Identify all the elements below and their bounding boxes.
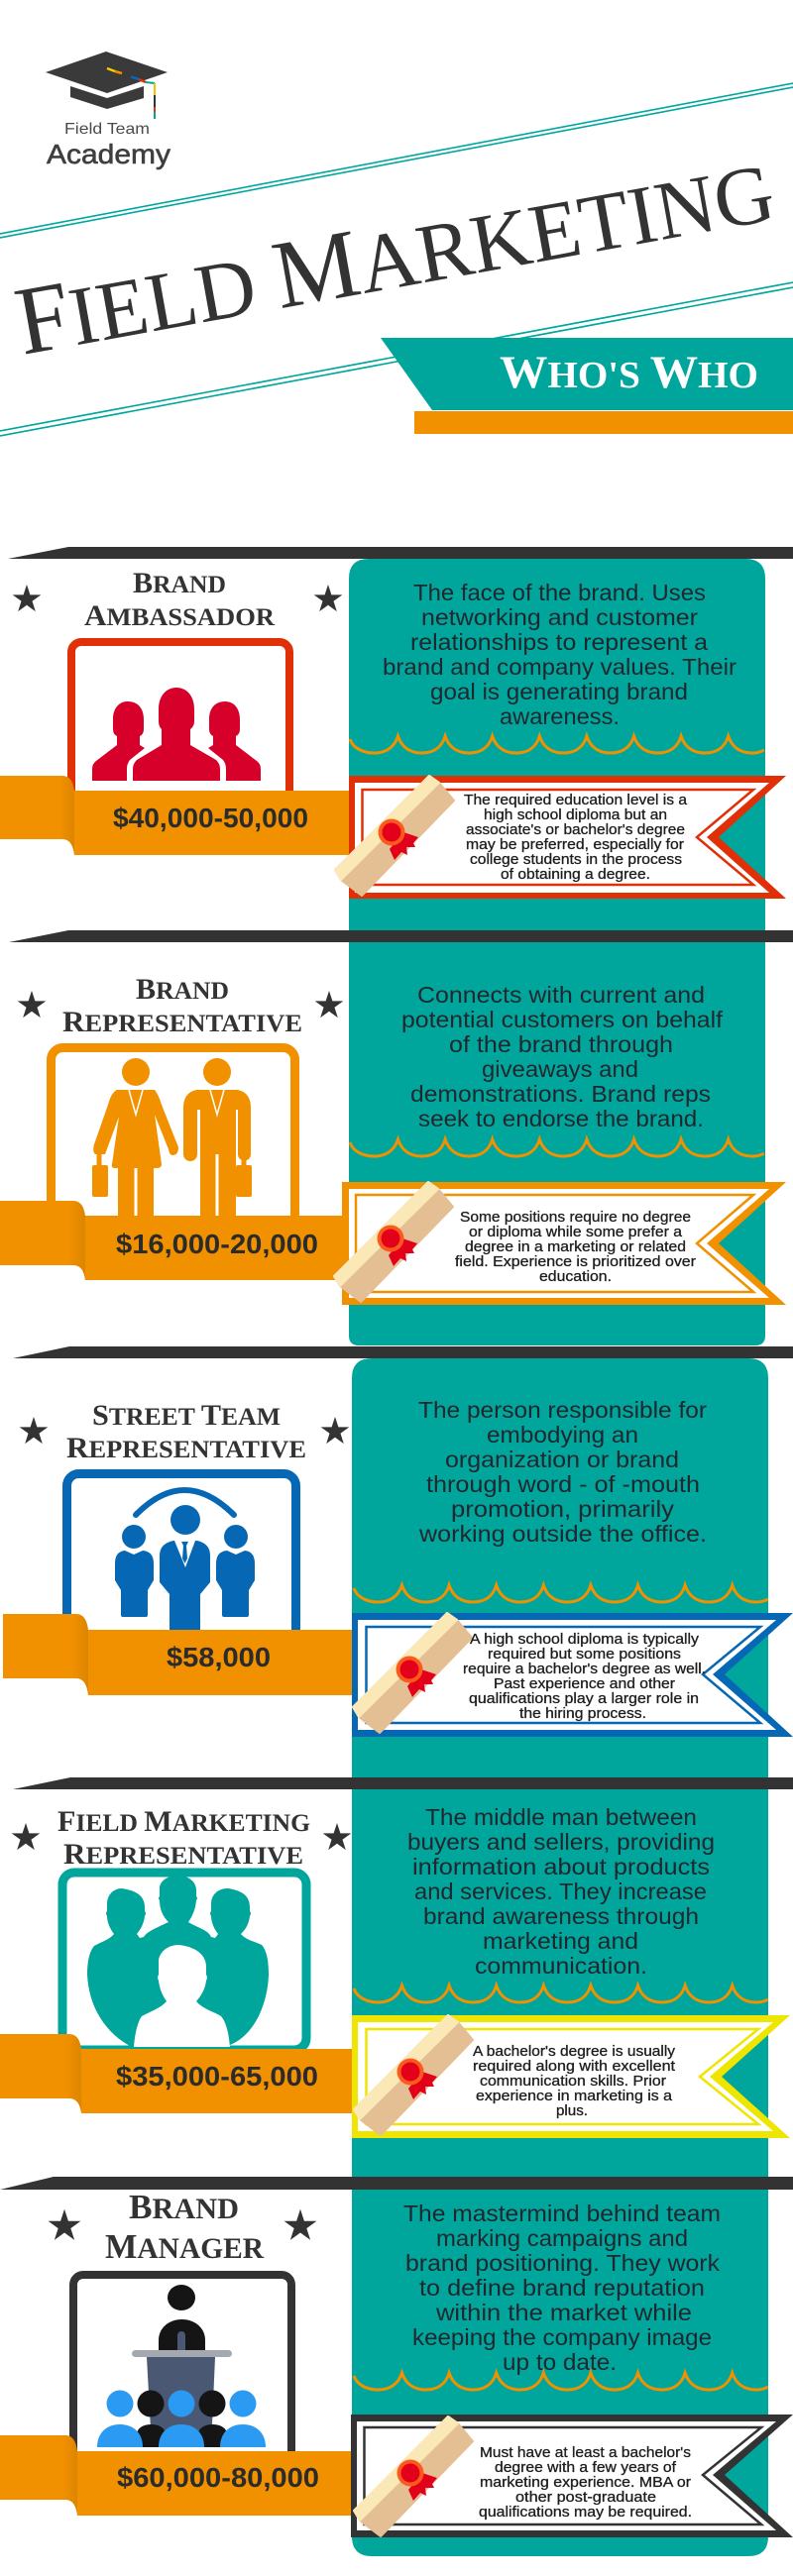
heading: MANAGER <box>105 2227 264 2266</box>
icon frame <box>71 642 289 810</box>
divider bar <box>9 930 793 942</box>
panel: teal column, Field Marketing Representative <box>352 1783 768 2180</box>
description: demonstrations. Brand reps <box>410 1081 711 1107</box>
description: communication. <box>475 1953 647 1979</box>
education text: or diploma while some prefer a <box>469 1225 683 1240</box>
salary: $35,000-65,000 <box>116 2061 318 2092</box>
salary ribbon <box>0 2034 353 2113</box>
education text: Must have at least a bachelor's <box>480 2445 691 2461</box>
salary: $16,000-20,000 <box>116 1229 318 1259</box>
salary ribbon <box>0 776 350 855</box>
divider bar <box>8 547 793 559</box>
salary: $60,000-80,000 <box>117 2462 319 2493</box>
scalloped divider <box>350 1139 764 1156</box>
education text: degree with a few years of <box>495 2460 677 2476</box>
icon: team with arc <box>115 1490 255 1630</box>
description: information about products <box>412 1854 710 1879</box>
description: of the brand through <box>449 1031 673 1057</box>
education text: may be preferred, especially for <box>466 837 684 853</box>
scalloped divider <box>350 736 764 753</box>
description: buyers and sellers, providing <box>407 1829 715 1855</box>
education text: marketing experience. MBA or <box>480 2475 691 2491</box>
education banner <box>352 2015 790 2138</box>
education text: communication skills. Prior <box>480 2074 666 2090</box>
icon: star left <box>12 1823 40 1850</box>
education text: degree in a marketing or related <box>465 1239 686 1255</box>
description: brand awareness through <box>423 1903 699 1929</box>
salary: $58,000 <box>167 1642 271 1672</box>
salary ribbon <box>0 1201 343 1280</box>
description: awareness. <box>500 703 620 729</box>
description: up to date. <box>503 2349 617 2375</box>
section: Brand Ambassador <box>0 547 793 899</box>
description: relationships to represent a <box>410 629 708 655</box>
subtitle text: WHO'S WHO <box>500 347 758 398</box>
description: goal is generating brand <box>430 679 688 704</box>
scalloped divider <box>354 1986 768 2002</box>
description: promotion, primarily <box>451 1496 675 1522</box>
education text: Some positions require no degree <box>460 1210 691 1226</box>
description: potential customers on behalf <box>401 1007 724 1032</box>
description: The middle man between <box>425 1804 697 1830</box>
education text: high school diploma but an <box>484 807 667 823</box>
description: keeping the company image <box>412 2324 712 2350</box>
education banner <box>351 2415 793 2537</box>
description <box>418 1397 707 1547</box>
education text <box>464 793 688 883</box>
salary: $40,000-50,000 <box>113 803 308 833</box>
icon: star left <box>18 991 46 1018</box>
education text <box>473 2044 676 2119</box>
icon: speaker at podium with audience <box>97 2285 266 2447</box>
description: The face of the brand. Uses <box>413 580 706 605</box>
description: through word - of -mouth <box>426 1471 700 1497</box>
education text: qualifications may be required. <box>479 2505 692 2521</box>
logo text: Field Team: Field Team <box>64 121 150 138</box>
heading: REPRESENTATIVE <box>62 1006 302 1038</box>
icon: star right <box>323 1823 351 1850</box>
heading <box>66 1399 306 1464</box>
description: marking campaigns and <box>436 2225 688 2251</box>
heading: STREET TEAM <box>92 1399 281 1432</box>
education text: field. Experience is prioritized over <box>455 1254 696 1270</box>
heading <box>62 973 302 1038</box>
education text <box>455 1210 696 1285</box>
education text: The required education level is a <box>464 793 688 808</box>
heading: BRAND <box>133 567 226 599</box>
heading: REPRESENTATIVE <box>63 1838 303 1871</box>
education text: required but some positions <box>488 1647 681 1663</box>
education banner <box>334 1182 786 1305</box>
section: Brand Manager <box>0 2177 793 2537</box>
icon: diploma scroll <box>354 2015 473 2135</box>
description: to define brand reputation <box>419 2275 705 2301</box>
description <box>401 982 724 1131</box>
heading: BRAND <box>136 973 229 1006</box>
description: and services. They increase <box>414 1878 707 1904</box>
description: embodying an <box>487 1422 638 1448</box>
icon: three people <box>92 688 261 781</box>
education text: A bachelor's degree is usually <box>473 2044 676 2060</box>
education text: require a bachelor's degree as well. <box>463 1662 706 1677</box>
education text <box>463 1632 706 1722</box>
double diagonal line: bottom <box>0 282 793 436</box>
education text <box>479 2445 692 2521</box>
logo text: Academy: Academy <box>47 139 170 169</box>
heading: FIELD MARKETING <box>57 1805 310 1838</box>
education text: other post-graduate <box>515 2490 656 2506</box>
divider bar <box>0 2177 793 2190</box>
education text: required along with excellent <box>473 2059 675 2075</box>
heading <box>105 2188 264 2266</box>
subtitle banner: Who's Who <box>381 338 793 434</box>
description: seek to endorse the brand. <box>418 1106 704 1131</box>
education text: the hiring process. <box>519 1706 646 1722</box>
description: brand positioning. They work <box>405 2250 721 2276</box>
salary ribbon <box>0 2435 352 2516</box>
description: networking and customer <box>421 604 698 630</box>
description: giveaways and <box>482 1056 638 1082</box>
panel: teal column, Street Team Representative <box>352 1358 768 1783</box>
logo: Field Team Academy <box>46 52 170 169</box>
education banner <box>335 776 786 899</box>
icon: star left <box>13 585 41 611</box>
heading <box>84 567 276 632</box>
icon: group silhouettes <box>87 1876 269 2048</box>
description <box>403 2200 721 2375</box>
education banner <box>352 1613 793 1737</box>
icon: businesswoman and businessman <box>92 1058 252 1216</box>
title: Field Marketing: FIELD MARKETING <box>8 135 782 376</box>
salary ribbon <box>3 1614 353 1695</box>
icon: diploma scroll <box>353 1613 472 1733</box>
education text: plus. <box>556 2103 588 2119</box>
panel: teal column, Brand Manager <box>352 2180 768 2556</box>
divider bar <box>13 1777 793 1789</box>
description: within the market while <box>435 2300 692 2325</box>
education text: Past experience and other <box>494 1676 675 1692</box>
double diagonal line: top <box>0 83 793 238</box>
icon: diploma scroll <box>335 776 454 896</box>
section: Field Marketing Representative <box>0 1777 793 2138</box>
icon frame <box>67 1474 295 1653</box>
icon: star left <box>49 2209 80 2240</box>
education text: associate's or bachelor's degree <box>466 822 685 838</box>
icon: star right <box>315 991 343 1018</box>
section: Street Team Representative <box>3 1346 793 1737</box>
description: The person responsible for <box>418 1397 707 1423</box>
description <box>383 580 736 729</box>
education text: A high school diploma is typically <box>470 1632 700 1648</box>
icon: star left <box>20 1417 48 1444</box>
icon frame <box>73 2275 291 2463</box>
panel: teal column, Brand Ambassador <box>349 559 765 931</box>
icon: star right <box>321 1417 349 1444</box>
education text: qualifications play a larger role in <box>469 1691 699 1707</box>
heading: BRAND <box>129 2188 239 2226</box>
description: The mastermind behind team <box>403 2200 721 2226</box>
panel: teal column, Brand Representative <box>349 936 765 1345</box>
icon: star right <box>314 585 342 611</box>
description: brand and company values. Their <box>383 654 736 680</box>
heading: REPRESENTATIVE <box>66 1432 306 1464</box>
heading: AMBASSADOR <box>84 599 276 632</box>
section: Brand Representative <box>0 930 793 1305</box>
icon frame <box>62 1873 306 2050</box>
description <box>407 1804 715 1979</box>
education text: of obtaining a degree. <box>501 867 650 883</box>
description: Connects with current and <box>417 982 705 1008</box>
description: working outside the office. <box>418 1521 707 1547</box>
icon: star right <box>284 2209 316 2240</box>
description: marketing and <box>483 1928 638 1954</box>
description: organization or brand <box>445 1447 679 1472</box>
icon: diploma scroll <box>354 2416 473 2536</box>
scalloped divider <box>354 2373 768 2390</box>
education text: education. <box>539 1269 612 1285</box>
education text: college students in the process <box>470 852 682 868</box>
scalloped divider <box>354 1585 768 1602</box>
icon: diploma scroll <box>334 1182 453 1302</box>
divider bar <box>13 1346 793 1358</box>
icon frame <box>52 1048 295 1227</box>
icon: graduation cap <box>46 52 168 119</box>
heading <box>57 1805 310 1871</box>
education text: experience in marketing is a <box>476 2089 673 2104</box>
